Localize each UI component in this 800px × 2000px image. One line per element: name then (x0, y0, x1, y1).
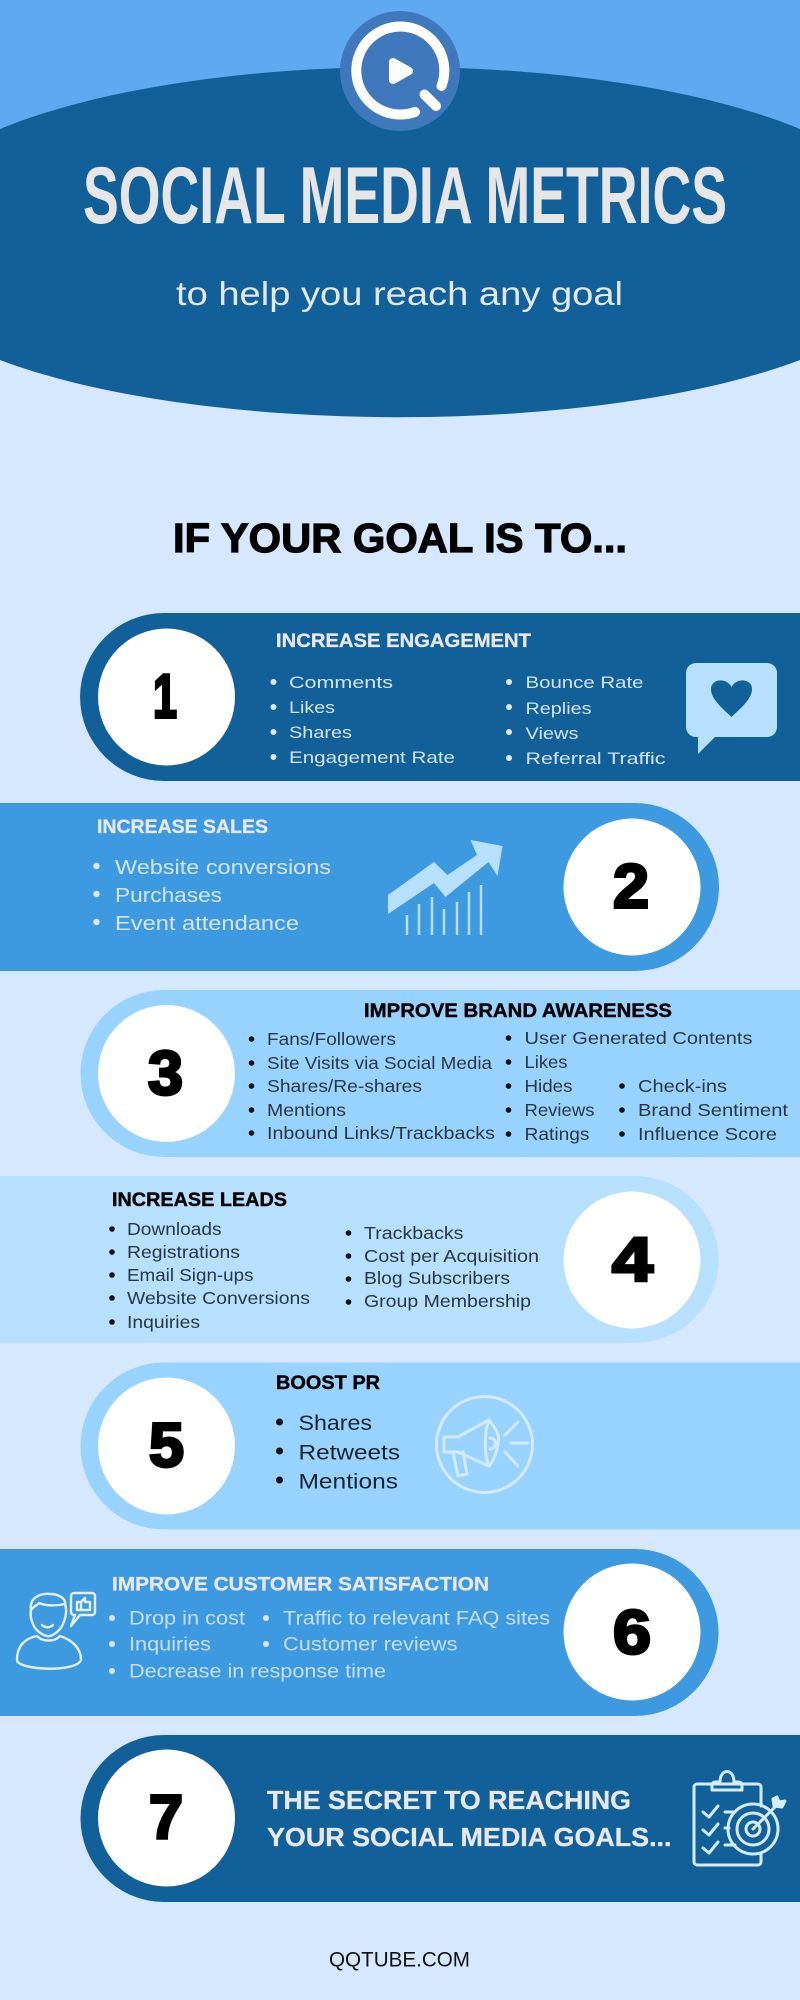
list column 1: Drop in cost (129, 1608, 246, 1630)
list: Retweets (298, 1442, 400, 1464)
number 2: 2 (613, 852, 649, 922)
list column 2: Cost per Acquisition (364, 1246, 539, 1266)
number 5: 5 (149, 1412, 184, 1480)
list column 1: Inquiries (127, 1312, 200, 1332)
list column 3: Influence Score (638, 1124, 777, 1144)
list: Purchases (115, 885, 222, 907)
list column 2: Group Membership (364, 1291, 531, 1311)
closing statement: YOUR SOCIAL MEDIA GOALS... (267, 1822, 672, 1852)
panel 4: increase leads (0, 1176, 718, 1343)
logo (340, 11, 460, 131)
icon: heart speech bubble (686, 663, 777, 754)
list column 1: Mentions (267, 1100, 346, 1120)
list column 1: Comments (289, 673, 393, 692)
list column 3: Check-ins (638, 1076, 727, 1096)
list column 2 (506, 1028, 753, 1144)
heading: BOOST PR (276, 1372, 380, 1394)
list: Mentions (298, 1470, 398, 1494)
icon: person with thumbs-up bubble (17, 1593, 95, 1669)
list column 1: Inquiries (129, 1635, 211, 1656)
list column 1: Decrease in response time (129, 1662, 386, 1682)
icon: rising chart arrow (388, 840, 502, 935)
icon: clipboard and target (694, 1772, 785, 1865)
list column 2: Reviews (524, 1100, 595, 1120)
panel 1: increase engagement (80, 613, 800, 781)
list column 2 (263, 1608, 550, 1656)
panel 2: increase sales (0, 803, 719, 971)
list column 1 (109, 1219, 310, 1332)
panel 7: the secret (81, 1735, 800, 1902)
list column 2 (346, 1223, 539, 1311)
list column 1: Registrations (127, 1242, 240, 1262)
list: Event attendance (115, 913, 299, 935)
list column 1: Likes (289, 698, 335, 717)
list column 1 (109, 1608, 386, 1682)
list (93, 857, 331, 935)
list column 1: Fans/Followers (267, 1029, 396, 1049)
number 6: 6 (613, 1598, 651, 1668)
icon: megaphone (436, 1396, 532, 1492)
list column 3 (619, 1076, 788, 1144)
list column 2: Customer reviews (283, 1635, 458, 1656)
list column 2: Bounce Rate (526, 673, 644, 692)
heading: INCREASE SALES (97, 816, 268, 838)
list column 1: Website Conversions (127, 1288, 310, 1308)
list column 1: Site Visits via Social Media (267, 1053, 492, 1073)
subtitle: to help you reach any goal (176, 275, 623, 312)
heading: INCREASE LEADS (112, 1189, 287, 1211)
list column 1 (249, 1029, 495, 1143)
footer: website: QQTUBE.COM (329, 1948, 470, 1972)
list: Website conversions (115, 857, 331, 879)
panel 3: improve brand awareness (81, 990, 800, 1157)
list column 2: Trackbacks (364, 1223, 464, 1243)
list column 2: Views (526, 724, 578, 743)
header banner (0, 11, 800, 417)
number 1: 1 (153, 662, 177, 732)
list column 2: Hides (524, 1076, 573, 1096)
panel 6: improve customer satisfaction (0, 1549, 718, 1716)
list column 2: User Generated Contents (524, 1028, 753, 1048)
number 4: 4 (612, 1226, 654, 1294)
closing statement: THE SECRET TO REACHING (267, 1785, 631, 1815)
list column 1: Shares (289, 723, 352, 742)
list column 1: Inbound Links/Trackbacks (267, 1123, 495, 1143)
list column 1: Shares/Re-shares (267, 1076, 422, 1096)
list column 2: Replies (526, 699, 592, 718)
panel 5: boost pr (81, 1362, 800, 1530)
list column 1 (270, 673, 455, 767)
heading: IMPROVE BRAND AWARENESS (364, 1000, 672, 1022)
list (276, 1412, 400, 1494)
list column 1: Downloads (127, 1219, 222, 1239)
list: Shares (298, 1412, 372, 1435)
list column 3: Brand Sentiment (638, 1100, 788, 1120)
heading: if your goal is to: IF YOUR GOAL IS TO... (173, 515, 627, 561)
list column 1: Engagement Rate (289, 748, 455, 767)
list column 2: Referral Traffic (526, 749, 666, 768)
heading: INCREASE ENGAGEMENT (276, 630, 531, 652)
list column 1: Email Sign-ups (127, 1265, 254, 1285)
list column 2: Likes (524, 1052, 568, 1072)
list column 2: Ratings (524, 1124, 590, 1144)
number 3: 3 (148, 1040, 183, 1108)
list column 2: Blog Subscribers (364, 1268, 510, 1288)
closing statement (267, 1785, 672, 1852)
number 7: 7 (149, 1784, 183, 1852)
heading: IMPROVE CUSTOMER SATISFACTION (112, 1574, 489, 1596)
list column 2 (506, 673, 666, 768)
list column 2: Traffic to relevant FAQ sites (283, 1608, 550, 1630)
